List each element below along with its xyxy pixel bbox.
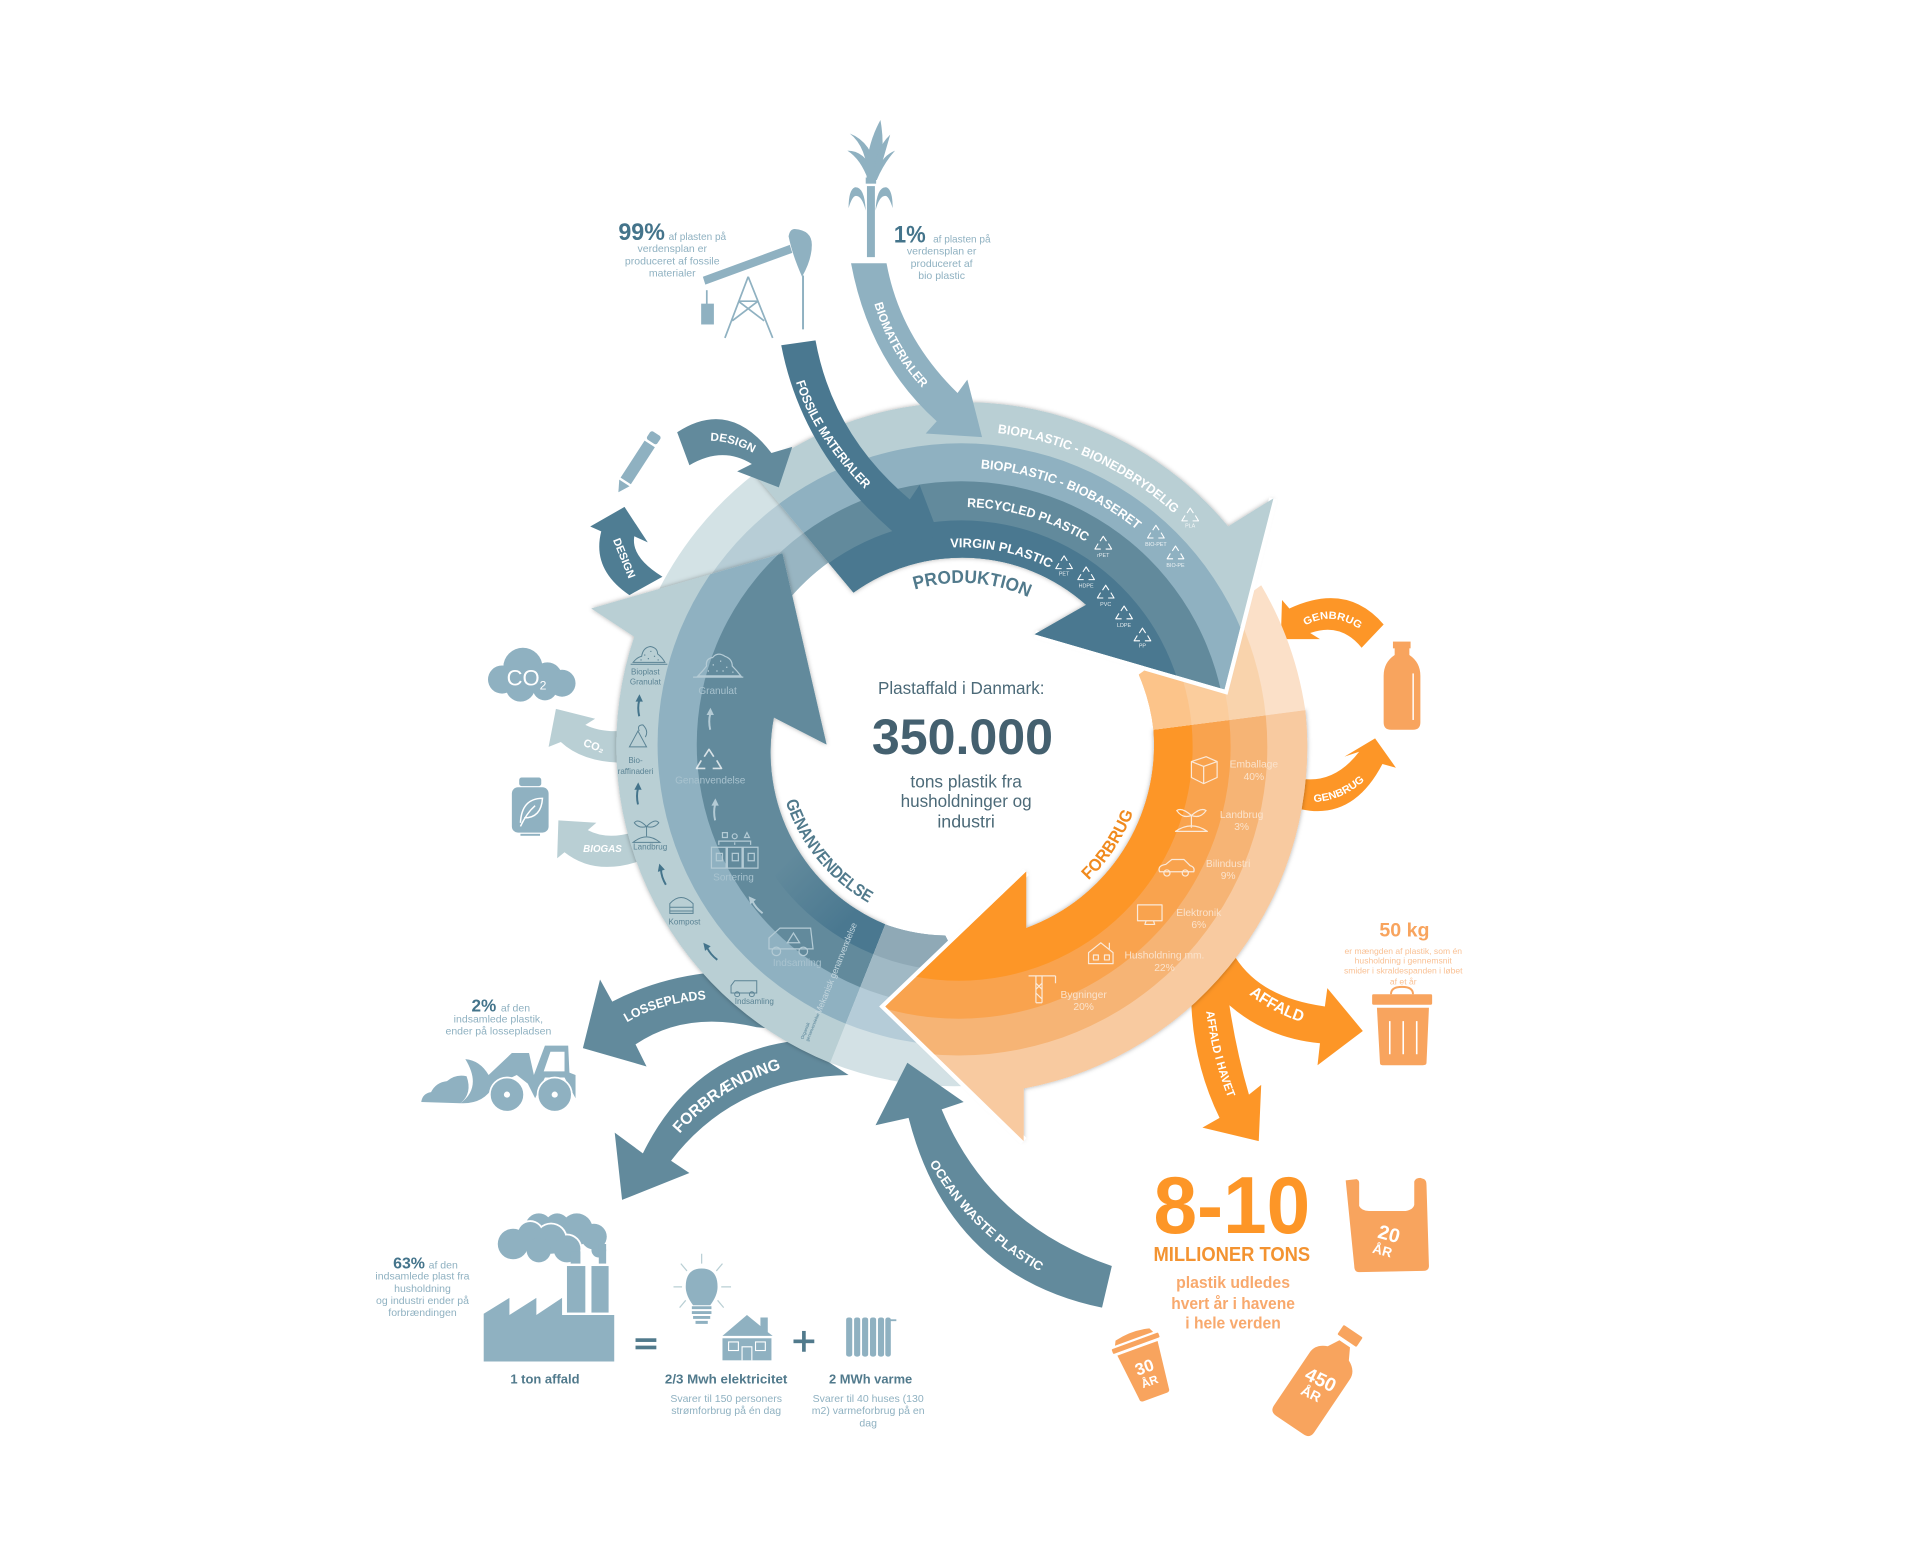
icon: coffee cup 30 years: 30 [1132,1355,1157,1380]
segment: bygninger: Bygninger [1061,990,1107,1001]
label: 1 ton affald: 1 ton affald [510,1372,580,1387]
label: mekanisk genanvendelse: Mekanisk genanvendelse [813,921,859,1016]
text: 50 kg: er mængden af plastik, som én [1344,946,1462,956]
arrow: design top: DESIGN [711,432,756,452]
inner band steps: genanvendelse: Sortering [713,872,754,883]
segment: bilindustri: Bilindustri [1206,859,1250,870]
text: 50 kg [1344,920,1463,986]
segment: bilindustri [1159,859,1250,882]
arrow: fossile materialer: FOSSILE MATERIALER [796,380,870,489]
icons: recycling codes: BIO-PE [1166,563,1185,569]
text: 2 percent: af den [501,1002,530,1014]
icon: factory [484,1213,614,1362]
label: organisk genanvendelse: Organisk [800,1021,811,1040]
arrow: losseplads [582,974,765,1066]
outer band steps: bioplast: Indsamling [735,997,774,1006]
arrow: design left: DESIGN [610,537,637,580]
segment: husholdning: Husholdning mm. [1125,951,1204,962]
text: elektricitet [665,1372,788,1417]
icons: recycling codes: PP [1139,644,1146,650]
symbol: equals [636,1338,656,1349]
arrow: genbrug bottom [1302,738,1396,812]
arrow: design top [677,419,792,488]
heading: forbrug: FORBRUG [1080,810,1132,880]
segment: landbrug: 3% [1234,822,1249,833]
icons: recycling codes: PET [1059,571,1070,577]
segment: elektronik: Elektronik [1176,908,1222,919]
text: varme: Svarer til 40 huses (130 [813,1393,924,1405]
band label: biobaseret: BIOPLASTIC - BIOBASERET [982,460,1142,528]
text: 2 percent: indsamlede plastik, [454,1013,543,1025]
inner band steps: genanvendelse: Genanvendelse [675,776,746,787]
heading: produktion: PRODUKTION [912,570,1032,597]
icons: recycling codes: PLA [1185,524,1196,530]
icon: radiator [846,1317,896,1357]
arrow: forbrænding: FORBRÆNDING [672,1060,780,1133]
arrow: ocean waste plastic [876,1062,1112,1308]
arrow: biogas: BIOGAS [583,844,622,855]
segment: husholdning [1089,943,1204,974]
icon: plastic bag 20 years [1346,1178,1429,1272]
icon: light bulb [673,1254,731,1322]
center text: 350.000 tons: Plastaffald i Danmark: [878,678,1044,698]
text: 63 percent [375,1255,470,1319]
icons: recycling codes: PVC [1100,602,1111,608]
segment: emballage [1191,757,1278,784]
center text: 350.000 tons: industri [937,812,995,832]
arrow: genbrug bottom: GENBRUG [1314,776,1364,802]
icon: coffee cup 30 years [1108,1324,1179,1405]
segment: husholdning: 22% [1154,963,1175,974]
icons: recycling codes: HDPE [1079,584,1094,590]
arrow: biogas [557,820,637,867]
icon: CO2 cloud [488,648,576,702]
icon: trash can [1372,987,1432,1065]
segment: landbrug: Landbrug [1220,810,1264,821]
icons: recycling codes: LDPE [1117,623,1132,629]
text: 63 percent: husholdning [394,1283,451,1295]
outer band steps: bioplast: Bio- [628,756,643,765]
text: 8-10 million tons: i hele verden [1185,1314,1281,1332]
symbol: plus [793,1331,814,1352]
arrow: biomaterialer: BIOMATERIALER [874,302,928,388]
text: 50 kg: smider i skraldespanden i løbet [1344,965,1463,975]
icon: plastic bag 20 years: ÅR [1371,1241,1394,1261]
icon: gas canister [512,778,549,836]
segment: emballage: Emballage [1230,760,1278,771]
inner band steps: genanvendelse: Granulat [698,686,737,697]
icons: recycling codes: rPET [1097,553,1110,559]
text: 99 percent: materialer [649,268,696,280]
recycling ring tail [830,924,961,1086]
text: 63 percent: indsamlede plast fra [375,1271,470,1283]
text: 63 percent: og industri ender på [376,1295,469,1307]
arrow: fossile materialer [781,340,934,531]
center text: 350.000 tons: tons plastik fra [910,771,1022,791]
text: 50 kg: 50 kg [1379,920,1429,942]
band label: bionedbrydelig: BIOPLASTIC - BIONEDBRYDELIG [998,424,1178,512]
outer band steps: bioplast: Landbrug [633,843,667,852]
outer band steps: bioplast: raffinaderi [618,767,654,776]
panel: forbrug ring [879,708,1310,1142]
segment: elektronik: 6% [1191,920,1206,931]
text: 8-10 million tons: 8-10 [1153,1161,1310,1251]
icon: coffee cup 30 years: ÅR [1139,1372,1160,1391]
segment: bilindustri: 9% [1221,871,1236,882]
text: 8-10 million tons: plastik udledes [1176,1274,1290,1292]
text: varme [812,1372,925,1429]
inner band steps: genanvendelse [675,654,821,969]
text: elektricitet: Svarer til 150 personers [670,1393,782,1405]
icon: bottle 450 years [1270,1318,1373,1439]
text: 63 percent: forbrændingen [388,1307,457,1319]
inner band steps: genanvendelse: Indsamling [773,958,821,969]
text: elektricitet: strømforbrug på én dag [671,1405,781,1417]
text: 50 kg: husholdning i gennemsnit [1355,956,1452,966]
text: 1 percent: produceret af [911,258,973,270]
text: 63 percent: af den [429,1259,458,1271]
orange ring tail [1138,586,1306,730]
label: organisk genanvendelse: genanvendelse [805,1012,821,1042]
icon: pencil [613,430,662,496]
arrow: affald and affald i havet [1191,958,1363,1142]
text: 99 percent: produceret af fossile [625,255,720,267]
text: varme: m2) varmeforbrug på en [812,1405,925,1417]
center text: 350.000 tons [872,678,1053,832]
text: 99 percent: verdensplan er [637,243,708,255]
outer band steps: bioplast: Granulat [630,677,662,686]
arrow: genbrug top [1281,598,1384,648]
segment: bygninger [1029,976,1107,1013]
text: elektricitet: 2/3 Mwh elektricitet [665,1372,788,1387]
text: 1 percent: af plasten på [933,233,991,245]
heading: genanvendelse: GENANVENDELSE [786,800,874,903]
text: 8-10 million tons [1153,1161,1310,1332]
text: 99 percent: af plasten på [669,231,726,243]
arrow: genbrug top: GENBRUG [1304,612,1362,628]
icon: CO2 cloud: 2 [540,678,547,692]
icon: bottle 450 years: ÅR [1298,1382,1324,1405]
outer band steps: bioplast [618,646,774,1006]
text: 8-10 million tons: hvert år i havene [1171,1295,1295,1313]
arrow: losseplads: LOSSEPLADS [623,990,706,1022]
band label: recycled: RECYCLED PLASTIC [968,498,1089,540]
text: 1 percent: bio plastic [918,270,965,282]
icon: loader [421,1046,576,1112]
label: organisk genanvendelse [800,1010,821,1042]
arrow: ocean waste plastic: OCEAN WASTE PLASTIC [931,1160,1043,1270]
outer band steps: bioplast: Bioplast [631,668,660,677]
outer band steps: bioplast: Kompost [669,917,701,926]
icon: CO2 cloud: CO [507,666,540,691]
text: 2 percent: ender på lossepladsen [445,1026,551,1038]
panel: produktion ring [755,400,1274,695]
arrow: forbrænding [614,1042,848,1200]
center text: 350.000 tons: husholdninger og [901,791,1032,811]
text: 1 percent [894,221,991,282]
text: varme: 2 MWh varme [829,1372,912,1387]
text: varme: dag [859,1417,877,1429]
center text: 350.000 tons: 350.000 [872,709,1053,765]
arrow: biomaterialer [851,263,982,438]
text: 99 percent: 99% [618,219,665,246]
icon: house [722,1315,773,1360]
icons: recycling codes [1056,508,1199,650]
segment: bygninger: 20% [1073,1002,1094,1013]
segment: emballage: 40% [1244,772,1264,783]
icon: oil pump [701,229,812,338]
text: 99 percent [618,219,726,280]
text: 63 percent: 63% [393,1255,425,1272]
production ring tail [659,476,828,596]
text: 1 percent: verdensplan er [907,246,977,258]
icons: recycling codes: BIO-PET [1145,542,1167,548]
arrow: affald and affald i havet: AFFALD I HAVET [1206,1012,1236,1096]
text: 2 percent: 2% [471,995,496,1015]
arrow: design left [590,507,662,595]
text: 2 percent [445,995,551,1038]
text: 1 percent: 1% [894,221,926,248]
panel: genanvendelse ring [591,552,887,1064]
arrow: affald and affald i havet: AFFALD [1249,988,1304,1020]
band label: virgin: VIRGIN PLASTIC [950,538,1053,567]
icon: sugarcane [847,120,895,257]
segment: landbrug [1175,809,1264,833]
text: 50 kg: af et år [1390,976,1417,986]
arrow: CO2: CO₂ [582,737,606,756]
icon: bottle 450 years: 450 [1301,1364,1339,1397]
segment: elektronik [1138,905,1222,931]
icon: bottle genbrug [1384,642,1420,730]
text: 8-10 million tons: MILLIONER TONS [1153,1244,1310,1266]
arrow: CO2 [549,709,621,763]
icon: plastic bag 20 years: 20 [1376,1221,1402,1248]
